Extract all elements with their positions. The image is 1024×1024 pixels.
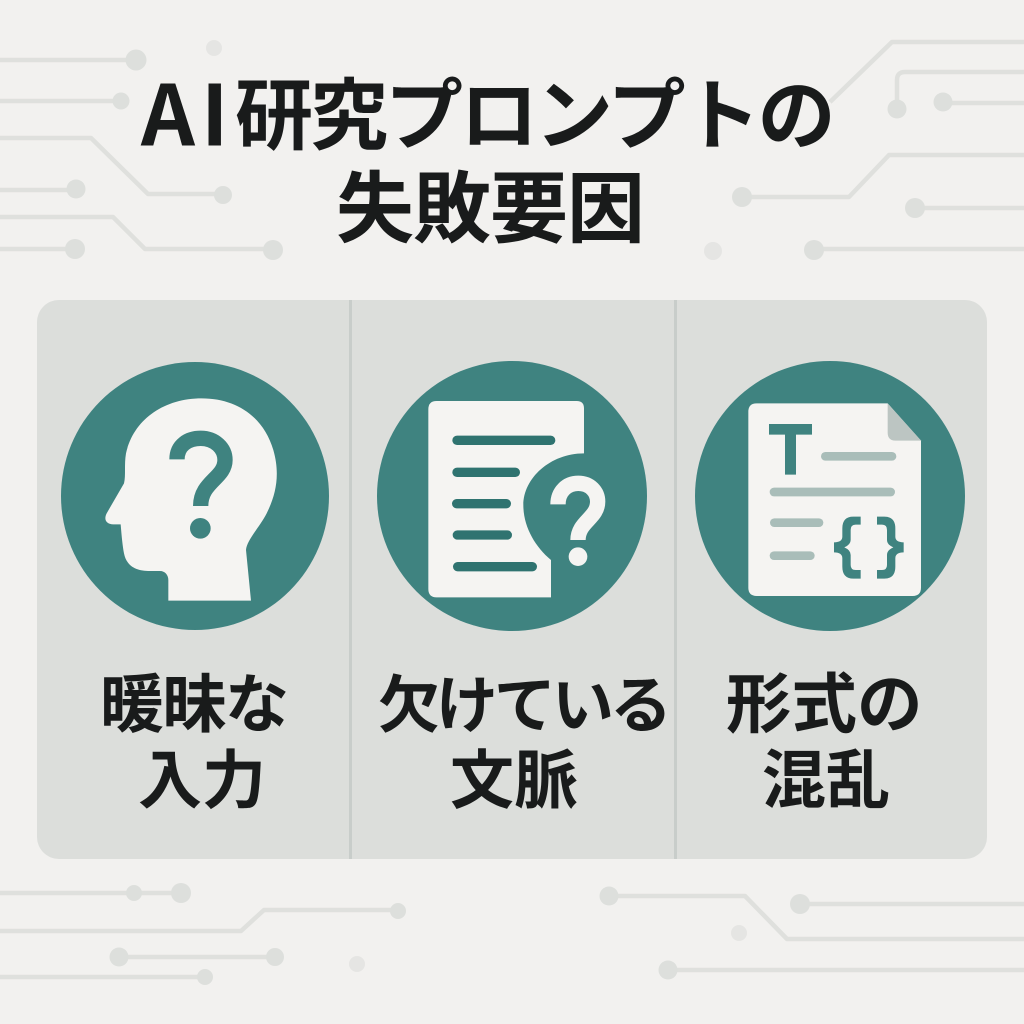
- circuit pattern: top left: [0, 40, 283, 260]
- label: format confusion: 形式の: [726, 651, 923, 746]
- title: 失敗要因: [336, 147, 644, 259]
- column: missing context: [377, 361, 668, 822]
- label: format confusion: 混乱: [762, 730, 890, 822]
- title: [140, 50, 833, 259]
- label: vague input: 入力: [138, 730, 266, 822]
- label: vague input: 暖昧な: [100, 654, 288, 746]
- circuit pattern: bottom left: [0, 883, 406, 985]
- icon: mixed format document: [695, 361, 965, 631]
- circuit pattern: bottom right: [600, 886, 1024, 980]
- label: missing context: 文脈: [450, 730, 578, 822]
- icon: document with question mark: [377, 361, 647, 631]
- column: format confusion: [695, 361, 965, 822]
- label: missing context: [378, 655, 668, 822]
- column: vague input: [61, 362, 329, 822]
- panel: three failure factors: [37, 300, 987, 859]
- title: AI: [140, 50, 229, 170]
- label: format confusion: [726, 651, 923, 822]
- icon: head with question mark: [61, 362, 329, 630]
- label: vague input: [100, 654, 288, 822]
- title: 研究プロンプトの: [235, 54, 833, 166]
- circuit pattern: top right: [704, 42, 1024, 260]
- label: missing context: 欠けている: [378, 655, 668, 745]
